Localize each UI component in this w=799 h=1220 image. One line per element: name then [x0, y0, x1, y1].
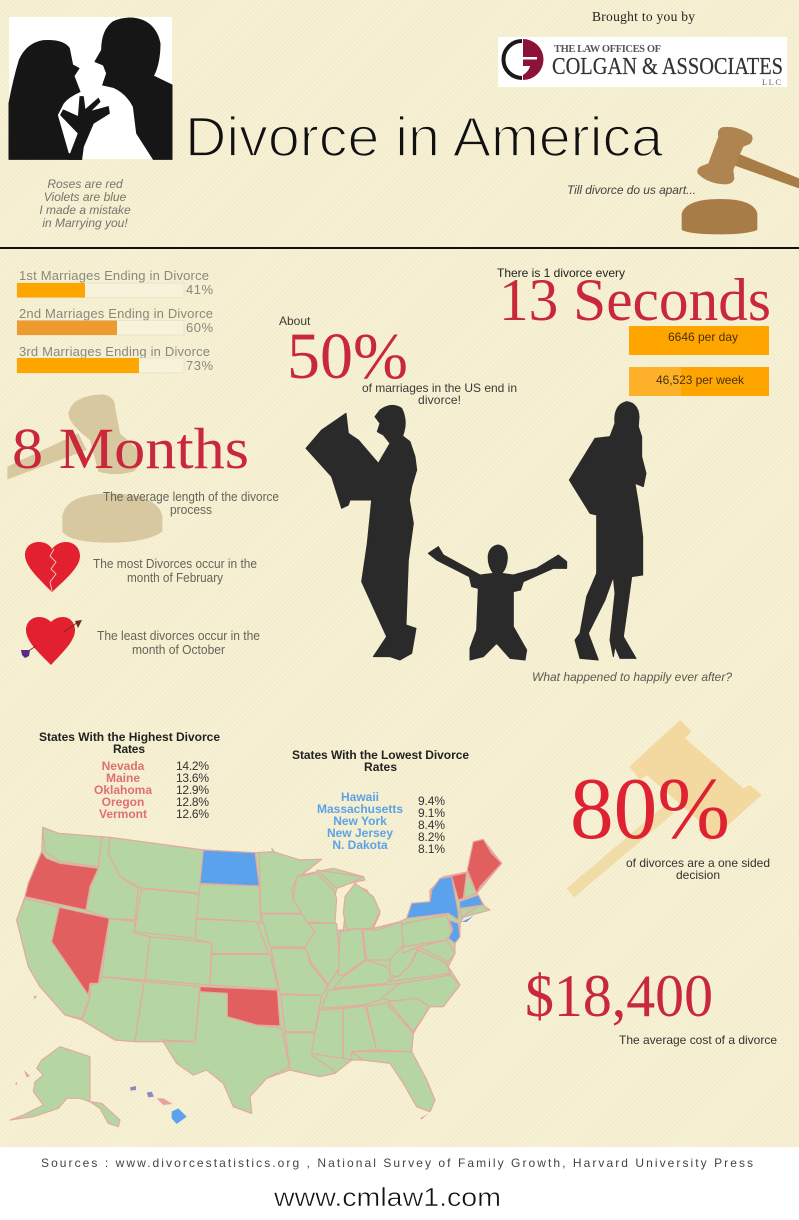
table: lowest divorce rates: Rates — [364, 760, 397, 774]
table: highest divorce rates: Nevada — [102, 759, 145, 773]
october text: The least divorces occur in the — [97, 628, 260, 643]
bar: 1st marriages: 1st Marriages Ending in Divorce — [19, 268, 209, 283]
man with newspaper — [306, 405, 417, 660]
stat: average cost: $18,400 — [525, 963, 713, 1029]
table: lowest divorce rates: New York — [333, 814, 387, 828]
stat: 13 seconds block: There is 1 divorce every — [497, 266, 625, 280]
box: per week: 46,523 per week — [656, 373, 745, 387]
stat: 50 percent block: 50% — [287, 320, 408, 393]
box: per day — [629, 326, 769, 355]
table: highest divorce rates: 12.9% — [176, 783, 209, 797]
bar: 2nd marriages — [17, 306, 213, 335]
sources: Sources : www.divorcestatistics.org , National Survey of Family Growth, Harvard University Press — [41, 1156, 753, 1170]
stat: 80 percent: 80% — [570, 761, 730, 858]
icon: gavel header — [682, 127, 799, 234]
stat: 50 percent block: of marriages in the US end in — [362, 381, 517, 395]
woman turned away — [569, 402, 646, 660]
bar: 1st marriages: 41% — [186, 282, 213, 297]
average length text — [103, 489, 279, 517]
table: lowest divorce rates: Massachusetts — [317, 802, 403, 816]
february text: The most Divorces occur in the — [93, 556, 257, 571]
table: lowest divorce rates: 8.1% — [418, 842, 445, 856]
stat: average cost: The average cost of a divorce — [619, 1033, 777, 1047]
box: per week — [629, 367, 769, 396]
table: highest divorce rates: Vermont — [99, 807, 147, 821]
law firm logo — [498, 37, 787, 87]
law firm logo: THE LAW OFFICES OF — [554, 44, 661, 55]
icon: heart with arrow — [21, 617, 82, 665]
title: Divorce in America — [185, 105, 664, 168]
bar: 3rd marriages: 73% — [186, 358, 213, 373]
table: highest divorce rates: Oregon — [102, 795, 144, 809]
caption: happily ever after: What happened to happily ever after? — [532, 670, 732, 684]
box: per day: 6646 per day — [668, 330, 738, 344]
average length text: process — [170, 502, 212, 517]
table: lowest divorce rates: Hawaii — [341, 790, 379, 804]
october text — [97, 628, 260, 657]
website: www.cmlaw1.com — [273, 1182, 501, 1212]
stat: 80 percent — [570, 761, 770, 882]
table: lowest divorce rates: 8.2% — [418, 830, 445, 844]
illustration: family silhouettes — [306, 402, 646, 660]
table: highest divorce rates: States With the Highest Divorce — [39, 730, 220, 744]
brought to you by: Brought to you by — [592, 9, 695, 24]
table: highest divorce rates: Rates — [113, 742, 145, 756]
bar: 1st marriages — [17, 268, 213, 298]
stat: 50 percent block — [279, 314, 517, 407]
table: highest divorce rates: 13.6% — [176, 771, 209, 785]
table: lowest divorce rates: 8.4% — [418, 818, 445, 832]
table: lowest divorce rates: 9.1% — [418, 806, 445, 820]
poem — [39, 177, 131, 230]
stat: 80 percent: decision — [676, 868, 720, 882]
stat: average cost — [525, 963, 777, 1047]
icon: faded gavel behind 8 months — [7, 394, 162, 543]
table: lowest divorce rates: New Jersey — [327, 826, 393, 840]
october text: month of October — [132, 642, 226, 657]
table: highest divorce rates: 12.6% — [176, 807, 209, 821]
bar: 2nd marriages: 60% — [186, 320, 213, 335]
table: lowest divorce rates: N. Dakota — [332, 838, 388, 852]
table: lowest divorce rates: States With the Lowest Divorce — [292, 748, 469, 762]
table: lowest divorce rates — [292, 748, 469, 856]
poem: in Marrying you! — [42, 216, 128, 230]
bar: 3rd marriages: 3rd Marriages Ending in Divorce — [19, 344, 210, 359]
stat: 13 seconds block — [497, 266, 771, 396]
stat: 8 months: 8 Months — [12, 416, 249, 481]
stat: 80 percent: of divorces are a one sided — [626, 856, 770, 870]
child with raised arms — [428, 545, 567, 660]
poem: Violets are blue — [44, 190, 127, 204]
header photo: arguing couple silhouette — [9, 17, 172, 159]
poem: I made a mistake — [39, 203, 131, 217]
table: highest divorce rates: 12.8% — [176, 795, 209, 809]
february text: month of February — [127, 570, 223, 585]
panel: marriages ending in divorce bars — [17, 268, 213, 373]
stat: 50 percent block: About — [279, 314, 311, 328]
stat: 13 seconds block: 13 Seconds — [499, 267, 771, 333]
icon: broken heart — [25, 542, 80, 592]
poem: Roses are red — [47, 177, 123, 191]
bar: 2nd marriages: 2nd Marriages Ending in Divorce — [19, 306, 213, 321]
february text — [93, 556, 257, 585]
tagline: Till divorce do us apart... — [567, 183, 696, 197]
bar: 3rd marriages — [17, 344, 213, 373]
table: highest divorce rates: Oklahoma — [94, 783, 152, 797]
average length text: The average length of the divorce — [103, 489, 279, 504]
footer — [0, 1147, 799, 1220]
stat: 50 percent block: divorce! — [418, 393, 461, 407]
table: highest divorce rates — [39, 730, 220, 821]
map: United States divorce rates — [10, 827, 502, 1127]
table: highest divorce rates: Maine — [106, 771, 140, 785]
table: lowest divorce rates: 9.4% — [418, 794, 445, 808]
icon: pale gavel behind 80 percent — [567, 720, 762, 897]
table: highest divorce rates: 14.2% — [176, 759, 209, 773]
law firm logo: LLC — [762, 77, 781, 87]
